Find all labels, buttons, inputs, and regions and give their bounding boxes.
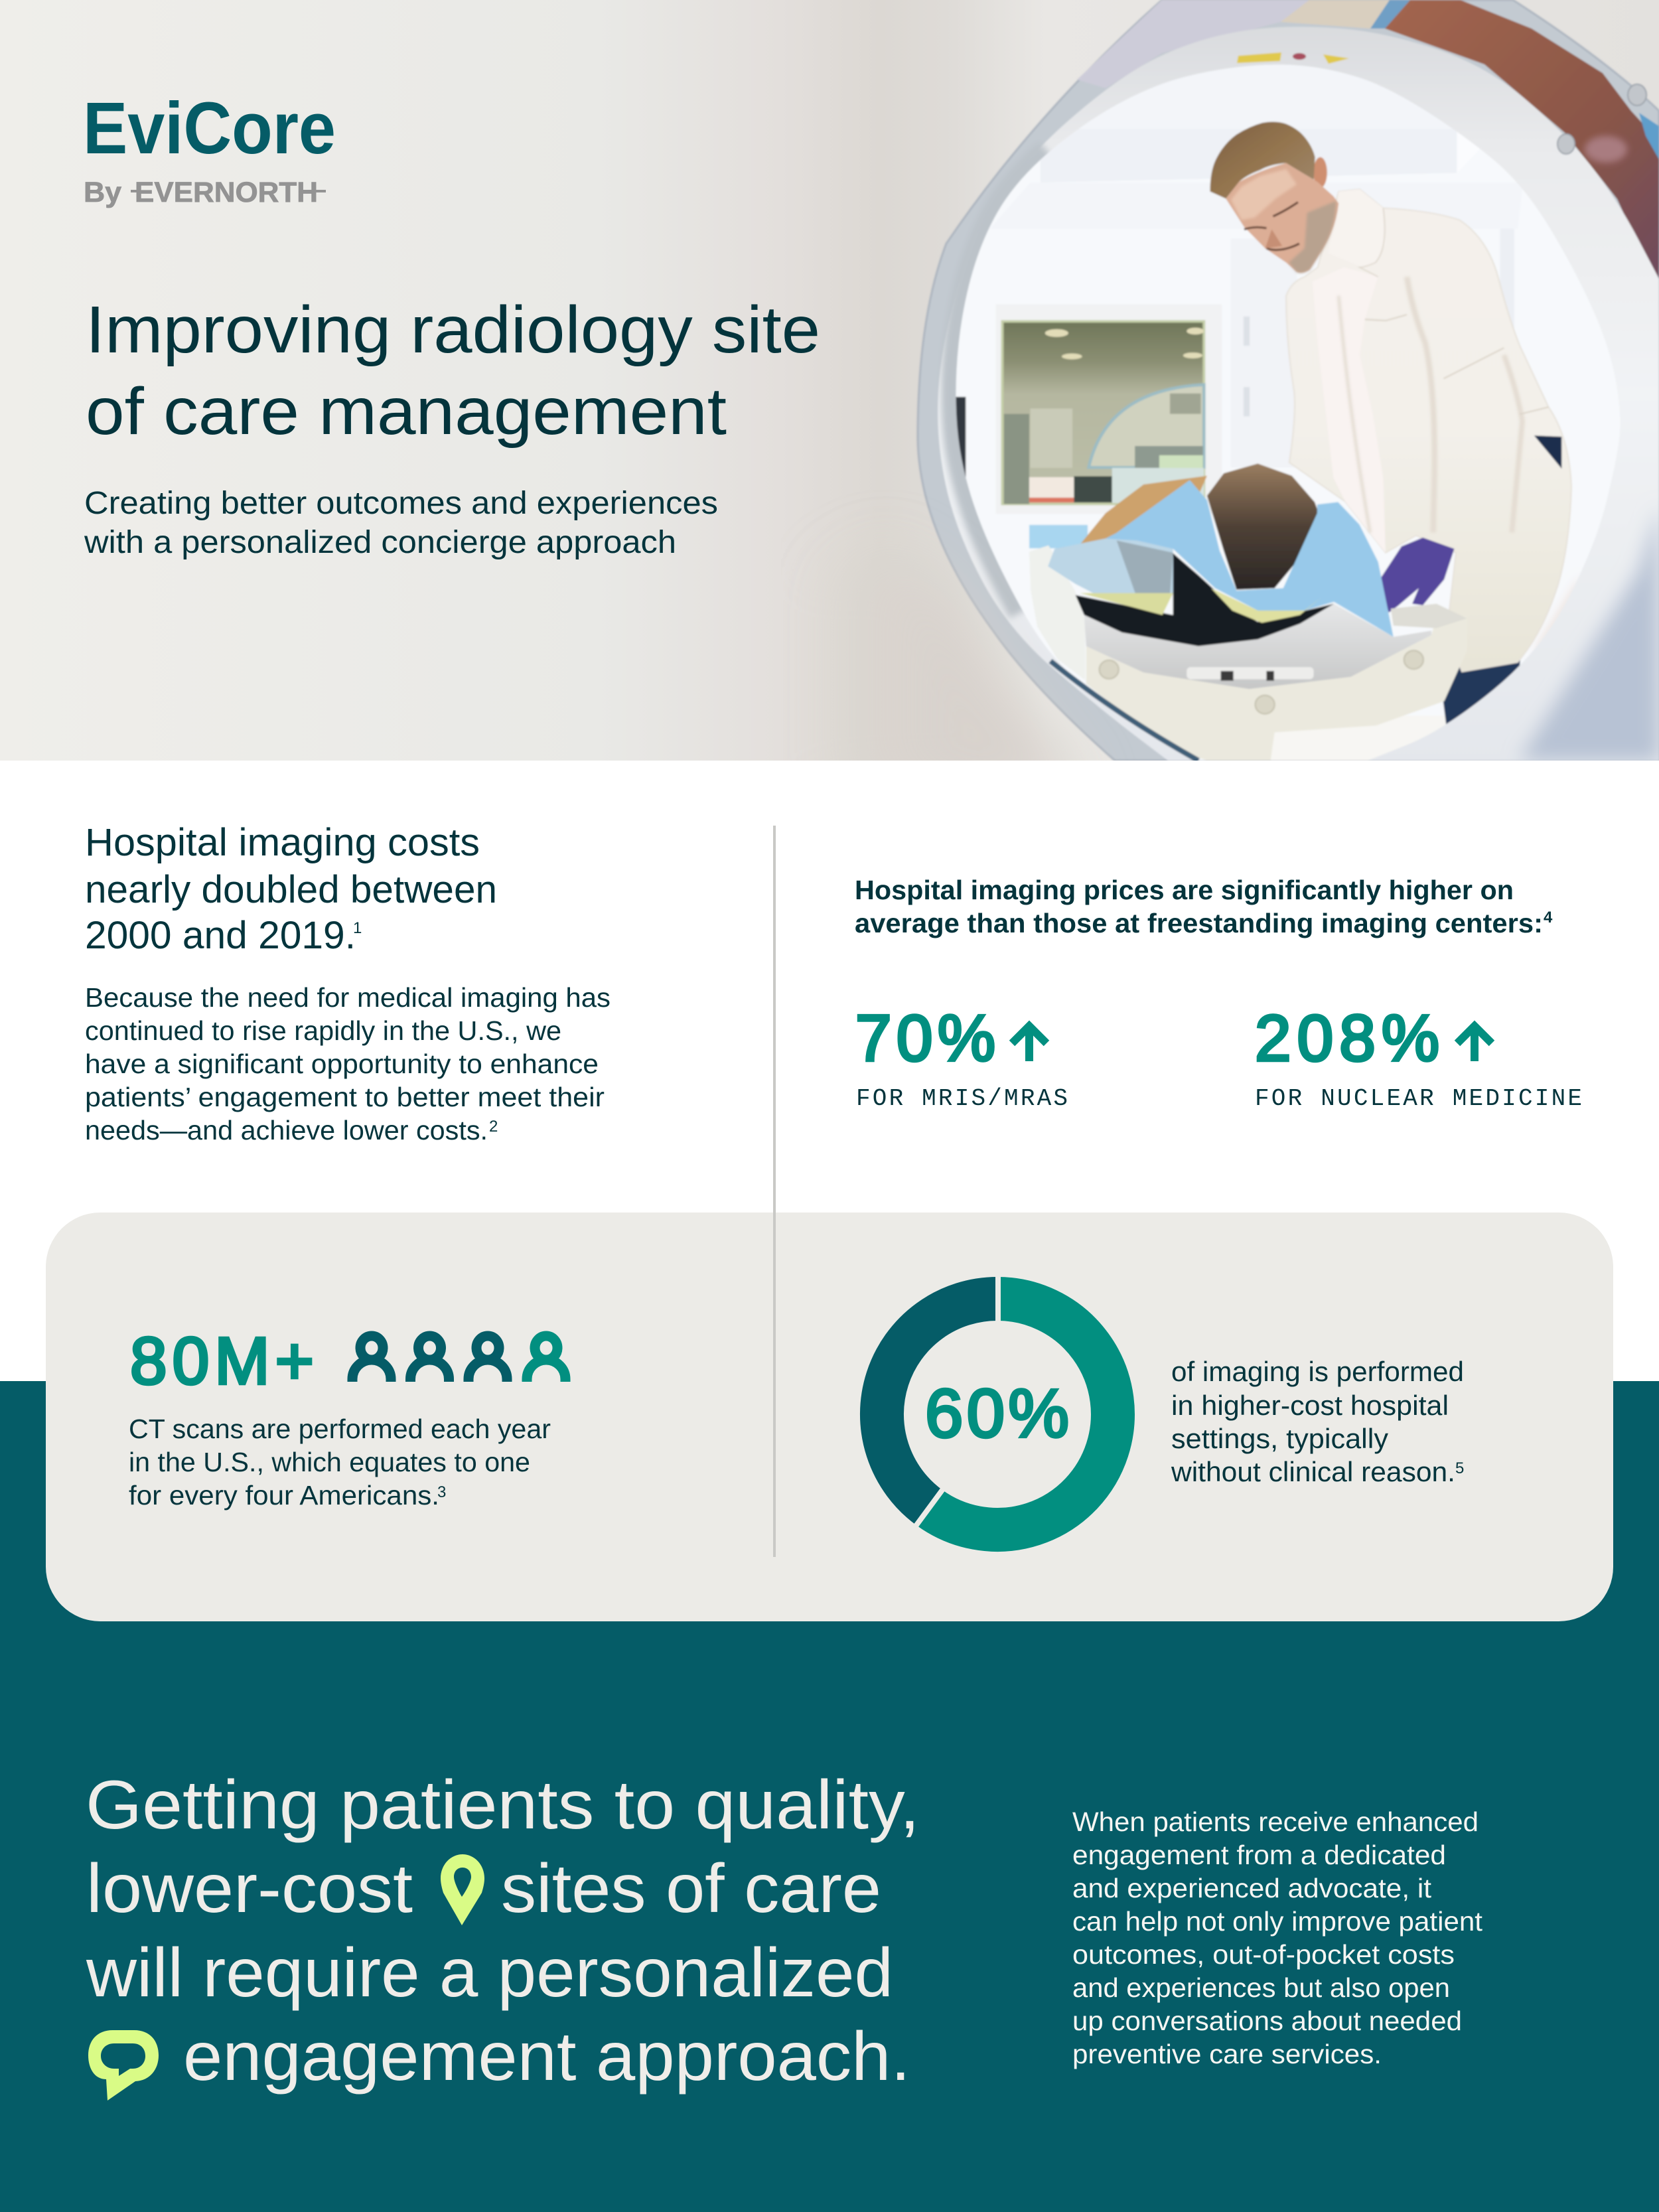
patient: orange shirt: [1080, 476, 1207, 544]
doctor: coat fold shading: [1338, 277, 1522, 533]
text block: enhanced engagement: [1072, 1806, 1483, 2069]
description: for every four Americans.: [129, 1480, 439, 1511]
table: bar with stripes: [1187, 667, 1314, 680]
patient: hair: [1207, 463, 1325, 590]
photo: doctor and patient at a CT scanner: [916, 0, 1659, 761]
scanner opening dark edge lower left: [1050, 661, 1198, 761]
divider: [773, 826, 776, 1557]
text block: 60% description: of imaging is performed: [1171, 1356, 1464, 1387]
text block: 60% description: [1171, 1356, 1464, 1487]
stat: 80M+ CT scans: [129, 1324, 565, 1511]
ring lower right tint: [1520, 504, 1659, 761]
heading: hospital imaging costs: nearly doubled between: [85, 868, 497, 911]
silver edge around left of opening: [956, 153, 1048, 611]
doctor: stubble: [1289, 201, 1336, 273]
text block: medical imaging need: [85, 982, 611, 1145]
icon: up arrow: [1457, 1026, 1492, 1061]
description: in the U.S., which equates to one: [129, 1447, 530, 1477]
wall panel right: [1500, 229, 1514, 375]
text block: 60% description: settings, typically: [1171, 1423, 1388, 1454]
heading: hospital imaging prices: Hospital imaging prices are significantly higher on: [855, 875, 1514, 905]
heading: hospital imaging costs: [85, 821, 497, 957]
chart: 60% donut: [882, 1272, 1113, 1530]
subtitle: Creating better outcomes and experiences: [84, 486, 718, 521]
title: of care management: [86, 374, 727, 449]
ring screws: [1557, 84, 1646, 154]
reflection: blue sliver: [1639, 113, 1659, 159]
reflection: pink highlight: [1585, 136, 1627, 163]
doctor: hair: [1210, 122, 1315, 198]
headline: personalized engagement: lower-cost: [86, 1850, 413, 1927]
reflection: cream: [1281, 0, 1390, 29]
text block: medical imaging need: continued to rise rapidly in the U.S., we: [85, 1015, 561, 1046]
title: [86, 293, 820, 449]
text block: medical imaging need: Because the need for medical imaging has: [85, 982, 611, 1013]
page background: white middle band: [0, 761, 1659, 1382]
donut: dark segment: [882, 1299, 997, 1508]
number: 80M+: [130, 1324, 314, 1398]
title: Improving radiology site: [86, 293, 820, 367]
table: long bed: [1029, 546, 1085, 680]
subtitle: [84, 486, 718, 560]
text block: enhanced engagement: and experiences but also open: [1072, 1972, 1450, 2003]
heading: hospital imaging prices: average than those at freestanding imaging centers:: [855, 908, 1543, 938]
headline: personalized engagement: engagement approach.: [183, 2018, 910, 2095]
hero background gradient: [0, 0, 1659, 761]
headline: personalized engagement: sites of care: [501, 1850, 881, 1927]
doctor: glove: [1378, 538, 1455, 613]
reflection: brown: [1385, 0, 1659, 292]
text block: 60% description: 5: [1455, 1459, 1464, 1477]
headline: personalized engagement: will require a personalized: [86, 1935, 893, 2012]
table: rail: [1391, 604, 1467, 628]
icon: up arrow: [1012, 1026, 1046, 1061]
panel: teal footer background: [0, 1381, 1659, 2212]
reflection: blue edge: [1370, 0, 1410, 29]
scanner opening: room scene: [929, 33, 1659, 765]
text block: medical imaging need: have a significant opportunity to enhance: [85, 1049, 599, 1079]
text block: medical imaging need: needs—and achieve lower costs.: [85, 1115, 488, 1145]
text block: enhanced engagement: engagement from a dedicated: [1072, 1840, 1446, 1870]
panel: grey stat card: [46, 1213, 1613, 1621]
table: knobs: [1100, 650, 1423, 714]
doctor: facial features: [1244, 202, 1299, 250]
reflection: lavender: [1077, 0, 1309, 88]
donut value: 60%: [925, 1375, 1069, 1451]
doctor: [1210, 122, 1571, 672]
text block: enhanced engagement: can help not only improve patient: [1072, 1906, 1483, 1937]
window glass: [1002, 321, 1204, 504]
blue patch: [1029, 525, 1088, 548]
text block: enhanced engagement: outcomes, out-of-pocket costs: [1072, 1939, 1455, 1970]
stat: 208% for nuclear medicine: [1255, 1001, 1582, 1112]
doctor: face: [1226, 163, 1338, 273]
heading: hospital imaging costs: 1: [353, 919, 362, 937]
doctor: forehead light: [1231, 169, 1297, 220]
doctor: pants: [1441, 657, 1520, 729]
skin blur right: [1538, 579, 1594, 657]
number: 208%: [1255, 1001, 1439, 1074]
stat: 70% for MRIs: [855, 1001, 1068, 1112]
description: CT scans are performed each year: [129, 1414, 551, 1444]
heading: hospital imaging prices: 4: [1544, 909, 1553, 926]
scanner outer band: [918, 0, 1659, 761]
icon: speech bubble: [88, 2030, 159, 2101]
ceiling: [1015, 63, 1523, 129]
text block: 60% description: without clinical reason.: [1171, 1456, 1455, 1487]
window lights: [1045, 328, 1204, 359]
logo: EviCore wordmark: EviCore: [83, 88, 336, 169]
logo: By: By: [84, 177, 121, 208]
icon: location pin: [441, 1854, 484, 1925]
text block: enhanced engagement: When patients receive enhanced: [1072, 1806, 1479, 1837]
donut: teal segment: [930, 1299, 1113, 1530]
left dark device: [954, 397, 966, 477]
doctor: shirt: [1313, 267, 1386, 553]
text block: enhanced engagement: and experienced advocate, it: [1072, 1873, 1432, 1903]
warning labels: [1237, 52, 1349, 64]
doctor: ear: [1313, 157, 1327, 188]
label: FOR MRIS/MRAS: [856, 1085, 1068, 1112]
description: [129, 1414, 551, 1511]
doctor: collar: [1328, 189, 1386, 267]
icon: four people: [352, 1336, 565, 1382]
window interior: [1089, 385, 1204, 467]
doctor: pocket and belt lines: [1365, 315, 1549, 414]
doctor: pocket slit: [1534, 435, 1561, 469]
heading: hospital imaging prices: [855, 875, 1553, 938]
number: 70%: [855, 1001, 995, 1074]
patient and table: [1029, 463, 1467, 761]
text block: medical imaging need: patients’ engagement to better meet their: [85, 1082, 605, 1112]
window frame: [996, 305, 1222, 514]
heading: hospital imaging costs: Hospital imaging costs: [85, 821, 480, 864]
text block: 60% description: in higher-cost hospital: [1171, 1390, 1449, 1421]
headline: personalized engagement: [86, 1767, 920, 2095]
scanner white inner ring: [938, 27, 1659, 761]
beige shell bottom left: [922, 576, 1072, 761]
table: front base: [1086, 615, 1467, 761]
floor: [1269, 716, 1452, 765]
text block: enhanced engagement: preventive care services.: [1072, 2039, 1382, 2069]
text block: medical imaging need: 2: [489, 1118, 498, 1136]
logo: EVERNORTH: EVERNORTH: [135, 177, 318, 208]
panel: hero header: [0, 0, 1659, 796]
patient: yellow liner: [1080, 593, 1173, 615]
label: FOR NUCLEAR MEDICINE: [1255, 1085, 1582, 1112]
door: [1231, 239, 1297, 467]
patient: blue drape: [1048, 480, 1394, 637]
text block: enhanced engagement: up conversations about needed: [1072, 2006, 1462, 2036]
doctor: coat: [1286, 189, 1571, 672]
table: grey dish: [1084, 604, 1431, 689]
patient: translucent drape left: [1048, 538, 1173, 599]
heading: hospital imaging costs: 2000 and 2019.: [85, 914, 356, 957]
description: 3: [437, 1483, 446, 1501]
headline: personalized engagement: Getting patients to quality,: [86, 1767, 920, 1844]
room background: [954, 63, 1594, 765]
patient: black pad: [1076, 553, 1334, 646]
subtitle: with a personalized concierge approach: [84, 525, 676, 560]
logo: EviCore by Evernorth: [83, 88, 336, 208]
